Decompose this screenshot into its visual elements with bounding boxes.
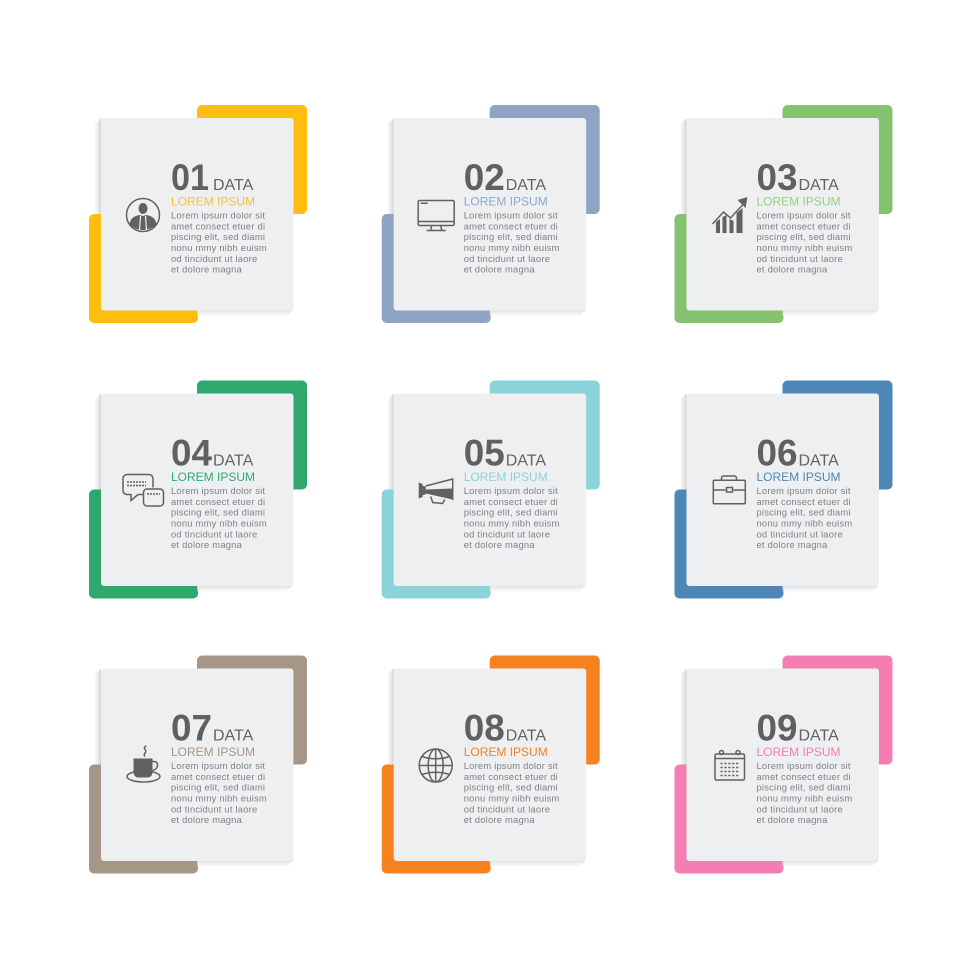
text block xyxy=(464,760,560,825)
text block: amet consect etuer di xyxy=(464,220,558,232)
text block xyxy=(756,210,852,274)
label: data: DATA xyxy=(798,177,839,194)
icon: growth chart xyxy=(712,197,748,233)
text block: et dolore magna xyxy=(464,814,535,825)
heading: LOREM IPSUM xyxy=(171,194,255,208)
text block: amet consect etuer di xyxy=(756,771,851,782)
text block: piscing elit, sed diami xyxy=(464,506,558,518)
text block: amet consect etuer di xyxy=(464,496,558,507)
icon: businessman xyxy=(126,198,160,232)
label: data: DATA xyxy=(213,728,254,744)
text block: piscing elit, sed diami xyxy=(171,506,265,518)
panel: card 06 xyxy=(674,380,892,598)
icon: briefcase xyxy=(713,476,746,504)
text block xyxy=(464,210,560,274)
text block: od tincidunt ut laore xyxy=(464,804,550,814)
text block: od tincidunt ut laore xyxy=(464,253,550,264)
icon: chat bubbles xyxy=(123,474,164,506)
text block xyxy=(171,485,267,550)
text block xyxy=(756,485,852,550)
text block: nonu mmy nibh euism xyxy=(464,792,560,804)
text block: Lorem ipsum dolor sit xyxy=(464,485,558,496)
heading: LOREM IPSUM xyxy=(756,194,841,208)
label: data: DATA xyxy=(506,177,546,194)
text block: Lorem ipsum dolor sit xyxy=(756,210,851,220)
text block: Lorem ipsum dolor sit xyxy=(756,760,851,771)
text block xyxy=(171,760,267,825)
text block: et dolore magna xyxy=(171,264,243,274)
number: 04 xyxy=(171,432,212,474)
number: 08 xyxy=(464,708,505,748)
text block: et dolore magna xyxy=(171,539,243,550)
text block: Lorem ipsum dolor sit xyxy=(171,485,265,496)
heading: LOREM IPSUM xyxy=(756,470,841,484)
text block: od tincidunt ut laore xyxy=(171,804,257,814)
text block: nonu mmy nibh euism xyxy=(464,518,560,528)
label: data: DATA xyxy=(798,728,839,744)
label: data: DATA xyxy=(506,452,546,470)
text block: et dolore magna xyxy=(756,264,828,274)
text block: Lorem ipsum dolor sit xyxy=(464,760,558,771)
label: data: DATA xyxy=(213,452,254,470)
text block: amet consect etuer di xyxy=(756,220,851,232)
number: 02 xyxy=(464,157,505,198)
text block: piscing elit, sed diami xyxy=(464,782,558,792)
text block: nonu mmy nibh euism xyxy=(464,242,560,253)
panel: card 09 xyxy=(674,656,892,874)
text block: amet consect etuer di xyxy=(171,771,265,782)
text block: piscing elit, sed diami xyxy=(756,782,851,792)
label: data: DATA xyxy=(213,177,254,194)
text block: et dolore magna xyxy=(464,264,535,274)
label: data: DATA xyxy=(798,452,839,470)
text block: amet consect etuer di xyxy=(464,771,558,782)
panel: card 08 xyxy=(382,656,600,874)
text block: amet consect etuer di xyxy=(756,496,851,507)
text block: od tincidunt ut laore xyxy=(171,253,257,264)
text block: nonu mmy nibh euism xyxy=(171,518,267,528)
text block: et dolore magna xyxy=(464,539,535,550)
text block: od tincidunt ut laore xyxy=(171,528,257,540)
text block: Lorem ipsum dolor sit xyxy=(464,210,558,220)
text block: et dolore magna xyxy=(756,539,828,550)
text block: piscing elit, sed diami xyxy=(756,506,851,518)
text block: amet consect etuer di xyxy=(171,496,265,507)
text block: et dolore magna xyxy=(756,814,828,825)
text block xyxy=(464,485,560,550)
icon: globe xyxy=(419,749,452,782)
icon: coffee cup xyxy=(127,746,160,782)
text block: nonu mmy nibh euism xyxy=(756,518,852,528)
text block: nonu mmy nibh euism xyxy=(756,242,852,253)
text block: nonu mmy nibh euism xyxy=(171,242,267,253)
text block: Lorem ipsum dolor sit xyxy=(756,485,851,496)
text block xyxy=(171,210,267,274)
number: 09 xyxy=(756,708,798,748)
heading: LOREM IPSUM xyxy=(464,194,548,208)
number: 07 xyxy=(171,708,212,748)
label: data: DATA xyxy=(506,728,546,744)
text block: piscing elit, sed diami xyxy=(464,231,558,242)
text block: amet consect etuer di xyxy=(171,220,265,232)
icon: megaphone xyxy=(419,479,453,504)
text block: piscing elit, sed diami xyxy=(171,782,265,792)
text block: piscing elit, sed diami xyxy=(756,231,851,242)
panel: card 02 xyxy=(382,105,600,323)
panel: card 07 xyxy=(89,656,307,874)
text block: Lorem ipsum dolor sit xyxy=(171,210,265,220)
number: 05 xyxy=(464,432,505,474)
text block: od tincidunt ut laore xyxy=(756,804,843,814)
panel: card 03 xyxy=(674,105,892,323)
panel: card 04 xyxy=(89,380,307,598)
text block: piscing elit, sed diami xyxy=(171,231,265,242)
text block: Lorem ipsum dolor sit xyxy=(171,760,265,771)
heading: LOREM IPSUM xyxy=(171,470,255,484)
heading: LOREM IPSUM xyxy=(171,745,255,759)
panel: card 01 xyxy=(89,105,307,323)
heading: LOREM IPSUM xyxy=(464,470,548,484)
heading: LOREM IPSUM xyxy=(464,745,548,759)
heading: LOREM IPSUM xyxy=(756,745,841,759)
icon: calendar xyxy=(715,750,744,780)
text block: nonu mmy nibh euism xyxy=(171,792,267,804)
text block: od tincidunt ut laore xyxy=(756,253,843,264)
text block: et dolore magna xyxy=(171,814,243,825)
number: 01 xyxy=(171,157,209,198)
number: 03 xyxy=(756,157,798,198)
number: 06 xyxy=(756,432,798,474)
text block xyxy=(756,760,852,825)
text block: od tincidunt ut laore xyxy=(756,528,843,540)
panel: card 05 xyxy=(382,380,600,598)
icon: monitor xyxy=(418,200,454,230)
text block: od tincidunt ut laore xyxy=(464,528,550,540)
text block: nonu mmy nibh euism xyxy=(756,792,852,804)
